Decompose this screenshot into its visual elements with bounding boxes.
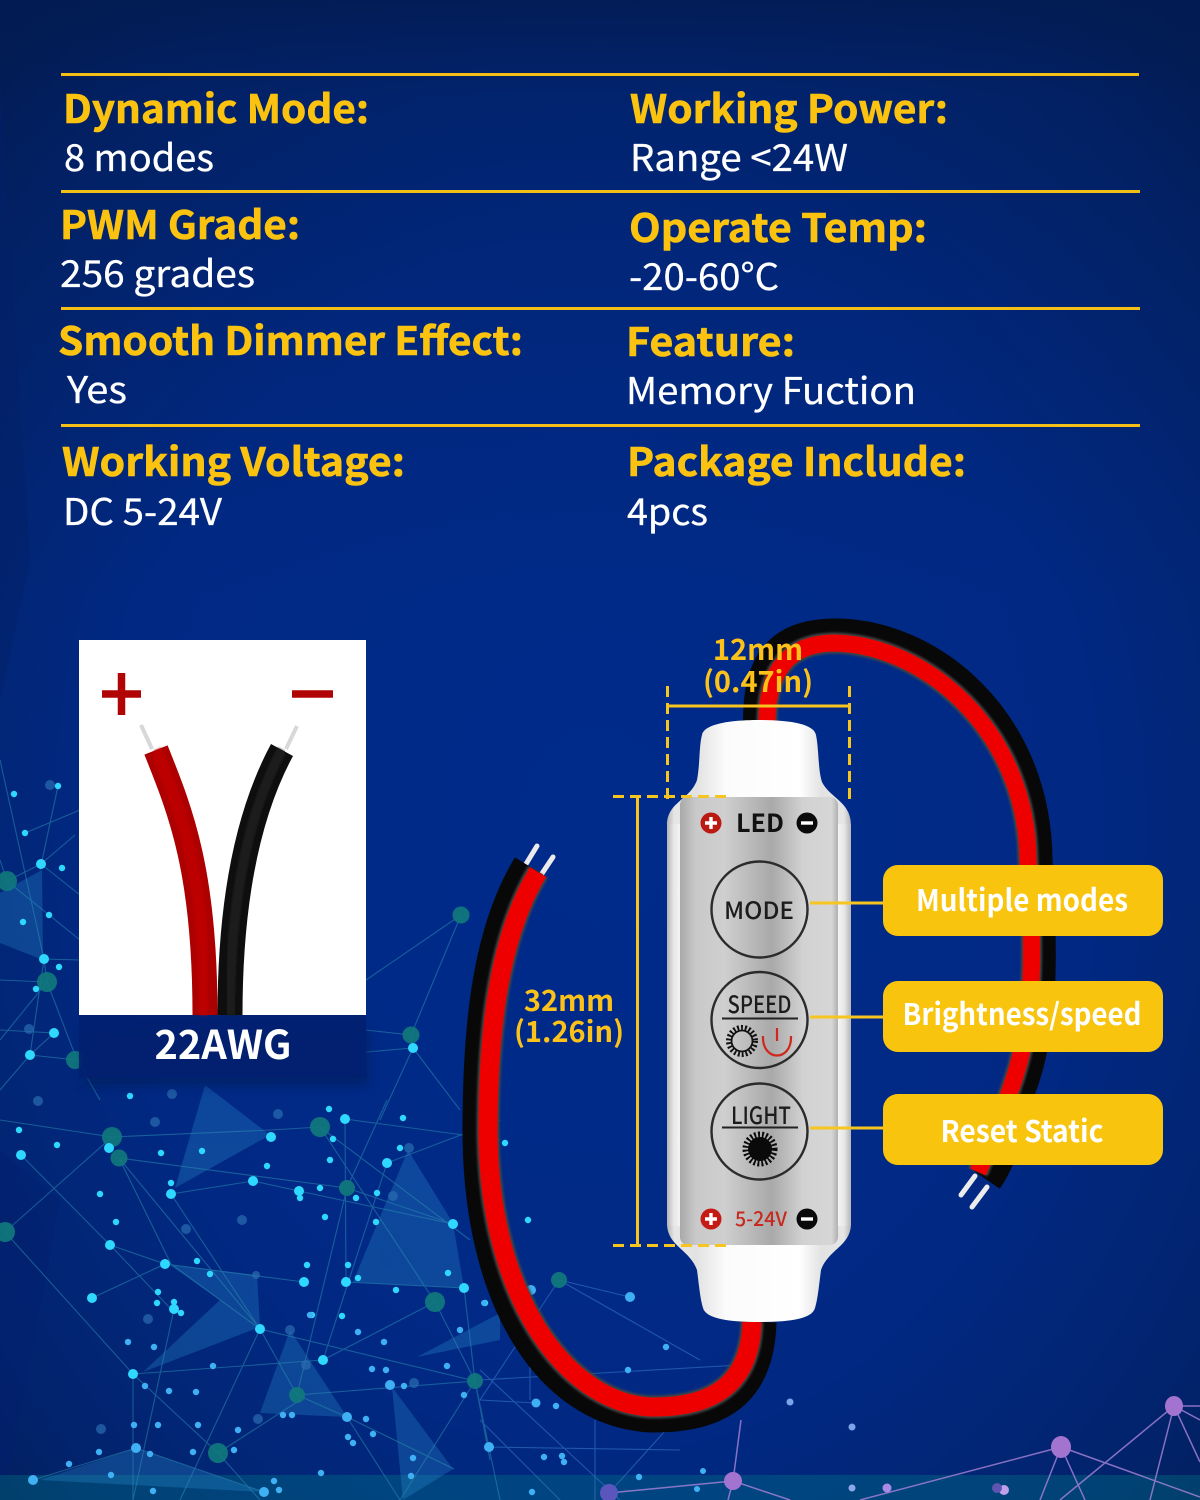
- button: speed: SPEED: [728, 985, 792, 1020]
- button: speed: [712, 972, 808, 1068]
- spec: working voltage: DC 5-24V: [63, 482, 223, 536]
- caption bar: [79, 1015, 366, 1078]
- bottom cap: [667, 1225, 851, 1322]
- black wire sample: [230, 726, 297, 1015]
- icon: sun filled: [746, 1134, 774, 1164]
- dimension: width: [667, 627, 850, 803]
- button: light: [712, 1084, 808, 1180]
- callout: brightness/speed: [810, 981, 1163, 1052]
- width label: (0.47in): [703, 659, 813, 701]
- caption: 22AWG: [154, 1013, 292, 1071]
- length label: 32mm: [524, 978, 614, 1020]
- spec: working power: [630, 79, 948, 182]
- specs table: [58, 74, 1140, 536]
- spec: feature: [626, 312, 916, 415]
- spec: working voltage: Working Voltage:: [62, 432, 405, 488]
- spec: feature: Memory Fuction: [626, 361, 916, 415]
- spec: operate temp: Operate Temp:: [629, 198, 927, 254]
- housing: [667, 824, 851, 1226]
- icon: input plus: [700, 1208, 722, 1230]
- spec: dynamic mode: [63, 79, 369, 182]
- button: light: LIGHT: [731, 1096, 791, 1131]
- spec: PWM grade: 256 grades: [60, 244, 255, 298]
- icon: input minus: [796, 1208, 818, 1230]
- spec: dynamic mode: Dynamic Mode:: [63, 79, 369, 135]
- icon: LED minus: [796, 812, 818, 834]
- spec: operate temp: -20-60°C: [629, 247, 779, 301]
- background purple network: [600, 1396, 1200, 1500]
- width label: 12mm: [713, 627, 803, 669]
- background network lines: [0, 760, 740, 1500]
- spec: package include: [627, 432, 966, 536]
- controller module: [667, 720, 851, 1322]
- LED label: LED: [736, 804, 784, 840]
- cable: left lead: [479, 846, 760, 1416]
- red wire sample: [141, 725, 205, 1015]
- spec: package include: Package Include:: [627, 432, 966, 488]
- spec: package include: 4pcs: [627, 482, 708, 536]
- cable: right lead: [758, 634, 1040, 1207]
- dimension: length: [514, 796, 730, 1246]
- background network triangles: [0, 870, 500, 1500]
- callout: multiple modes: Multiple modes: [916, 876, 1128, 920]
- icon: minus: [292, 690, 333, 698]
- background network nodes: [0, 780, 706, 1497]
- voltage label: 5-24V: [735, 1203, 787, 1232]
- icon: power: [763, 1028, 791, 1056]
- spec: PWM grade: PWM Grade:: [60, 195, 300, 251]
- callout: multiple modes: [810, 865, 1163, 936]
- spec: working power: Working Power:: [630, 79, 948, 135]
- panel: wire gauge: [79, 640, 369, 1086]
- callout: brightness/speed: Brightness/speed: [902, 990, 1142, 1034]
- spec: feature: Feature:: [626, 312, 795, 368]
- button: mode: [712, 862, 808, 958]
- icon: LED plus: [700, 812, 722, 834]
- spec: working voltage: [62, 432, 405, 536]
- silver face plate: [680, 797, 838, 1245]
- spec: PWM grade: [60, 195, 300, 298]
- length label: (1.26in): [514, 1009, 624, 1051]
- icon: sun outline: [728, 1028, 756, 1054]
- callout: reset static: Reset Static: [940, 1107, 1104, 1151]
- top cap: [667, 720, 851, 825]
- icon: plus: [102, 673, 141, 715]
- callout: reset static: [810, 1094, 1163, 1165]
- spec: working power: Range <24W: [630, 128, 848, 182]
- spec: dynamic mode: 8 modes: [64, 128, 214, 182]
- spec: operate temp: [629, 198, 927, 301]
- button: mode: MODE: [724, 891, 794, 926]
- spec: smooth dimmer effect: [58, 311, 523, 414]
- spec: smooth dimmer effect: Yes: [66, 360, 127, 414]
- spec: smooth dimmer effect: Smooth Dimmer Effect:: [58, 311, 523, 367]
